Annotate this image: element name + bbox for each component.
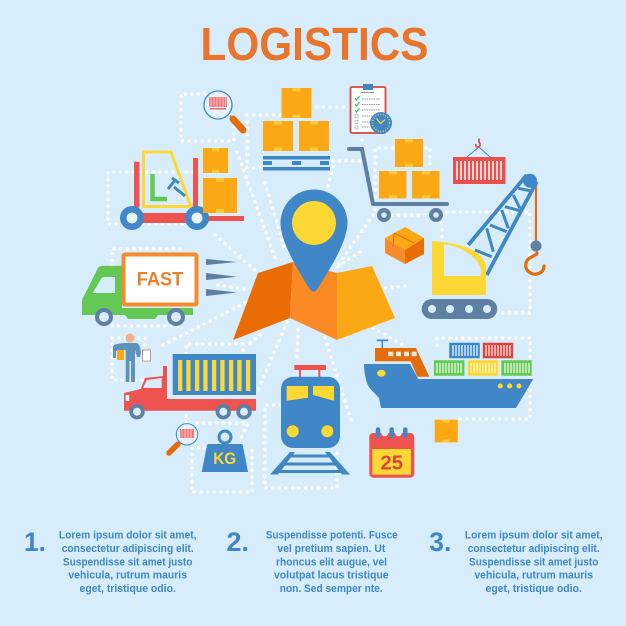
- icon: checklist clipboard with clock: [350, 84, 392, 134]
- icon: speed lines: [206, 259, 237, 296]
- step 1 text: Suspendisse sit amet justo: [63, 556, 193, 568]
- step 1 text: [59, 530, 197, 595]
- step 2 text: Suspendisse potenti. Fusce: [266, 530, 398, 542]
- step 3 number: 3.: [429, 527, 451, 557]
- step 3 text: eget, tristique odio.: [486, 583, 582, 595]
- icon: KG weight: [202, 431, 248, 472]
- icon: fast delivery truck: FAST: [137, 268, 183, 290]
- step 3 text: Lorem ipsum dolor sit amet,: [465, 530, 603, 542]
- step 2 text: vel pretium sapien. Ut: [277, 543, 386, 555]
- step 2 text: non. Sed semper nte.: [280, 583, 383, 595]
- step 3 text: consectetur adipiscing elit.: [468, 543, 600, 555]
- step 1 text: Lorem ipsum dolor sit amet,: [59, 530, 197, 542]
- step 2 text: volutpat lacus tristique: [274, 570, 389, 582]
- icon: fast delivery truck: [82, 254, 196, 326]
- icon: worker: [113, 334, 150, 382]
- title: LOGISTICS: [200, 18, 428, 70]
- icon: cargo ship: [364, 340, 533, 408]
- step 3 text: vehicula, rutrum mauris: [474, 570, 593, 582]
- step 1 text: vehicula, rutrum mauris: [68, 570, 187, 582]
- icon: hanging red container: [453, 138, 506, 184]
- icon: cart with boxes: [349, 139, 447, 222]
- icon: KG weight: KG: [213, 449, 236, 468]
- step 2 text: [266, 530, 398, 595]
- step 1 number: 1.: [24, 527, 46, 557]
- icon: calendar: [369, 430, 414, 478]
- icon: pallet with boxes: [263, 88, 330, 170]
- icon: cardboard box: [385, 227, 424, 264]
- icon: single box: [435, 420, 458, 442]
- icon: forklift: [120, 148, 244, 230]
- icon: calendar: 25: [381, 452, 403, 474]
- step 1 text: eget, tristique odio.: [80, 583, 176, 595]
- icon: map: [233, 262, 395, 340]
- step 1 text: consectetur adipiscing elit.: [62, 543, 194, 555]
- step 2 number: 2.: [226, 527, 249, 557]
- icon: container truck: [124, 354, 256, 419]
- icon: crane: [422, 174, 544, 319]
- step 2 text: rhoncus elit augue, vel: [276, 556, 387, 568]
- step 3 text: [465, 530, 603, 595]
- step 3 text: Suspendisse sit amet justo: [469, 556, 599, 568]
- icon: barcode magnifier: [204, 91, 243, 130]
- icon: small barcode magnifier: [169, 424, 198, 453]
- icon: location pin: [280, 190, 348, 292]
- containers on deck: [435, 344, 531, 375]
- icon: train: [270, 365, 350, 474]
